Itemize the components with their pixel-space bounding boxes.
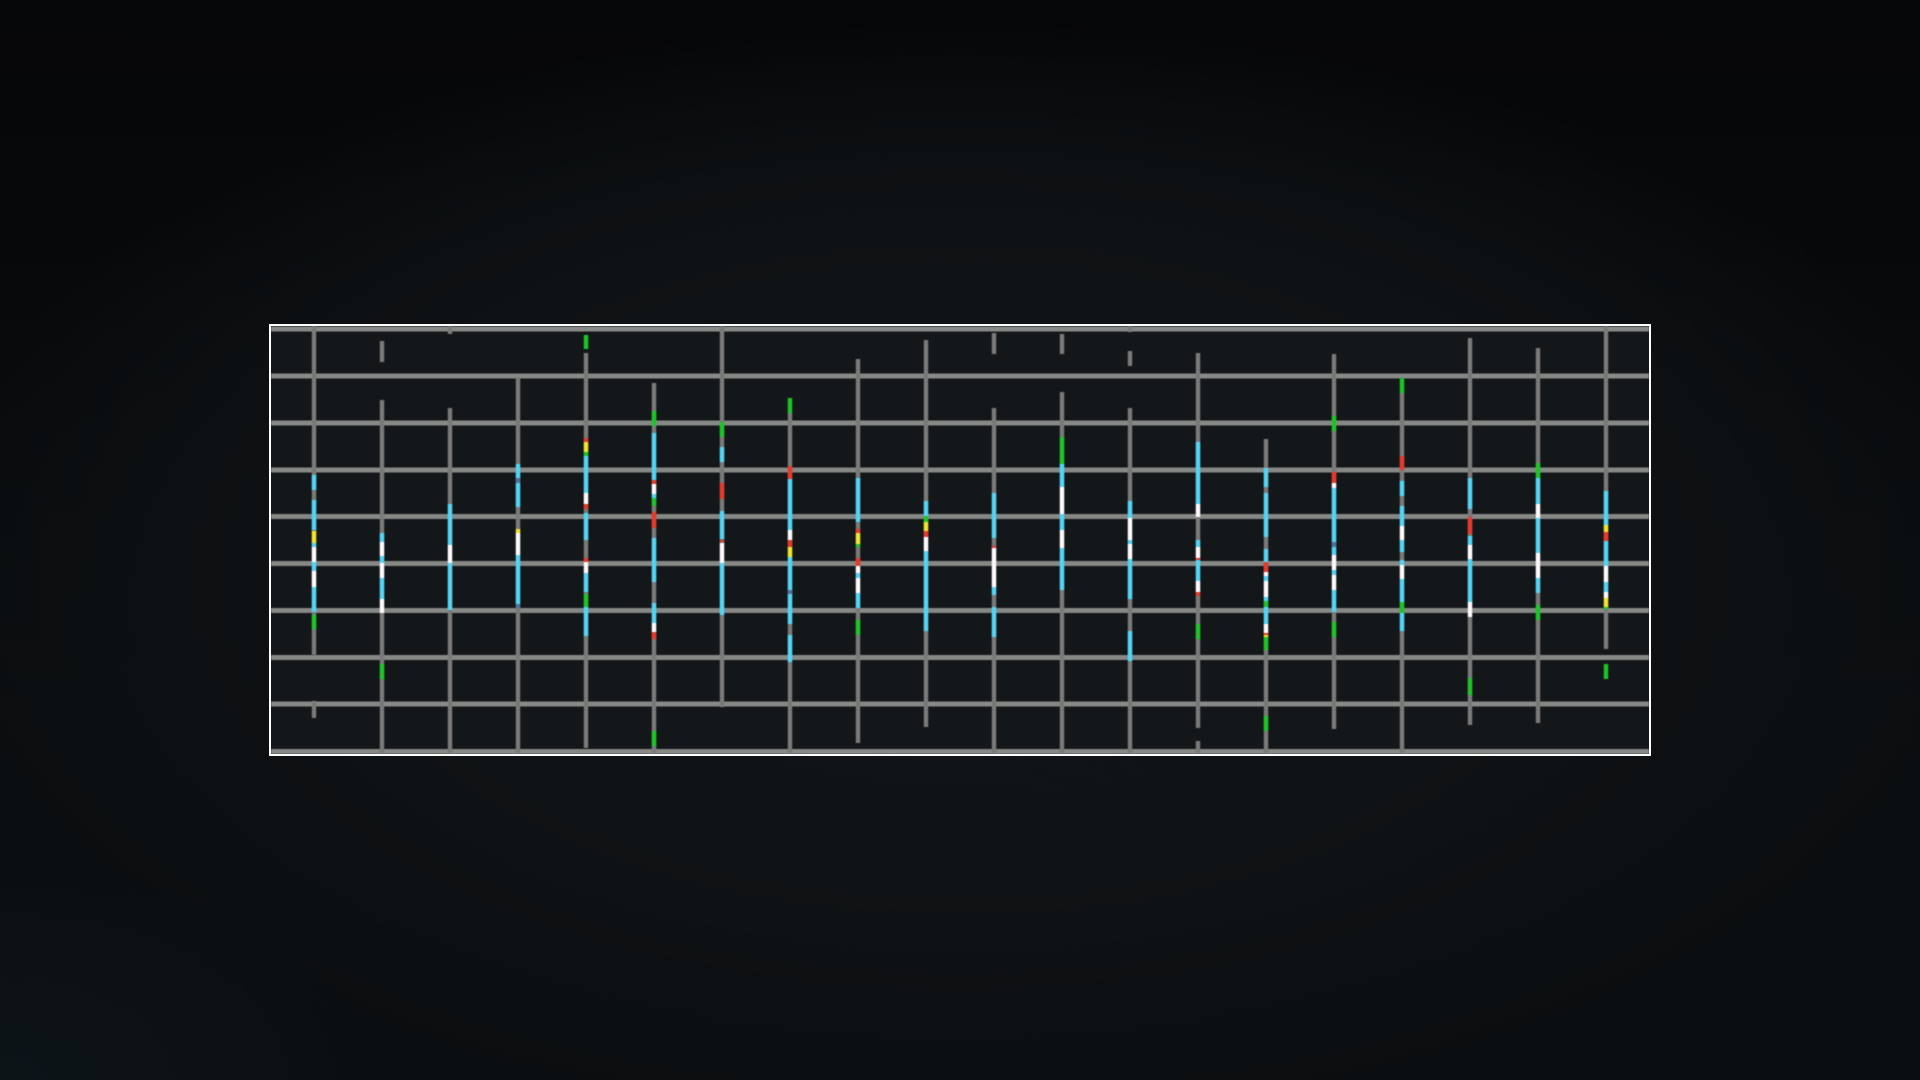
- column 17: [1400, 378, 1404, 753]
- column 15: [1264, 439, 1268, 753]
- chart frame: [270, 325, 1650, 755]
- column 14: [1196, 353, 1200, 753]
- column 2: [380, 341, 384, 753]
- column 6: [652, 383, 656, 753]
- column 7: [720, 326, 724, 707]
- column 10: [924, 340, 928, 727]
- chart interior: [270, 325, 1650, 755]
- column 4: [516, 377, 520, 753]
- column 19: [1536, 348, 1540, 723]
- column 18: [1468, 338, 1472, 725]
- column 13: [1128, 326, 1132, 753]
- column 1: [312, 326, 316, 718]
- column 9: [856, 359, 860, 743]
- column 11: [992, 333, 996, 753]
- column 12: [1060, 334, 1064, 753]
- column 5: [584, 335, 588, 748]
- column 8: [788, 398, 792, 753]
- column 16: [1332, 354, 1336, 729]
- column 20: [1604, 326, 1608, 679]
- column 3: [448, 326, 452, 753]
- horizontal grid lines: [271, 326, 1649, 754]
